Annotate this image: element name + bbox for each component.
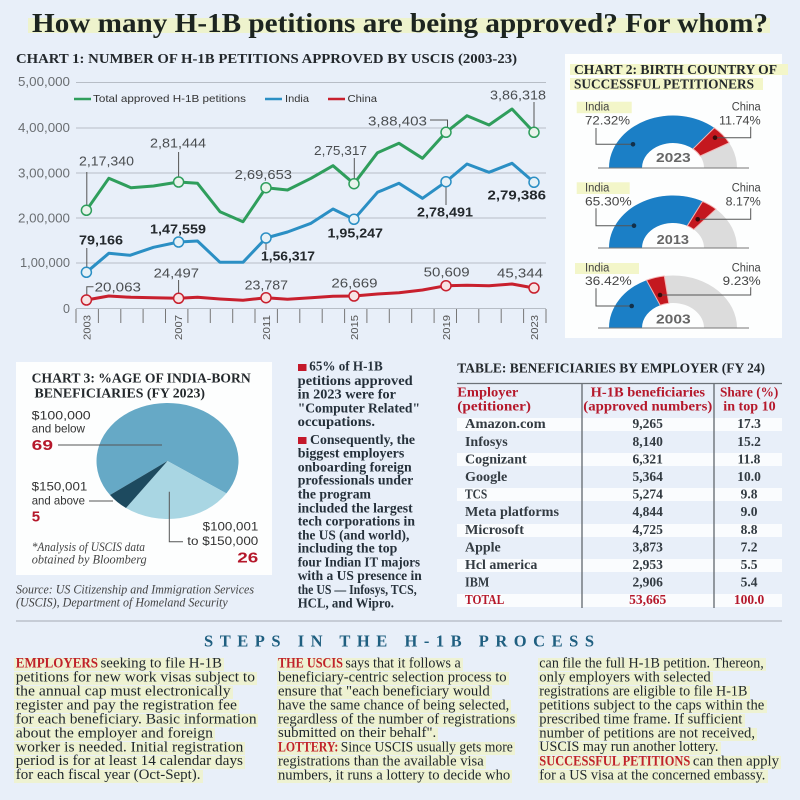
label: $150,001 and above (32, 480, 88, 526)
panel: chart 1 line chart (16, 51, 546, 340)
data labels: China: 45,344 (497, 267, 543, 281)
y axis labels (18, 75, 70, 316)
text block: key points: Consequently, the (310, 433, 415, 448)
text block: key points: included the largest (298, 501, 413, 516)
steps column 1: about the employer and foreign (16, 725, 214, 741)
steps heading: STEPS IN THE H-1B PROCESS (204, 632, 594, 651)
x axis year labels (82, 315, 541, 340)
label: $100,000 and below: $100,000 (32, 408, 91, 422)
table column: share: 17.3 (737, 416, 761, 431)
table column: employer: TCS (465, 487, 487, 502)
data labels: China (95, 266, 543, 295)
chart 3 heading: BENEFICIARIES (FY 2023) (34, 385, 205, 400)
text block: key points: the program (298, 487, 371, 502)
text block: key points: in 2023 were for (298, 387, 396, 402)
text block: key points: 65% of H-1B (309, 360, 383, 375)
table column: beneficiaries: 2,953 (633, 557, 663, 572)
steps column 3: can then apply (693, 754, 780, 770)
data labels: China: 20,063 (95, 281, 141, 295)
gauge 2013: India (585, 183, 610, 195)
series: India (81, 163, 539, 277)
x axis year labels: 2007 (174, 315, 185, 340)
steps column 1: seeking to file H-1B (100, 656, 222, 672)
steps column 2: says that it follows a (345, 656, 461, 672)
table header: Share (%) (720, 386, 779, 401)
data labels: total: 2,69,653 (235, 168, 292, 182)
steps column 3: only employers with selected (539, 670, 711, 686)
legend (74, 93, 377, 105)
gauge 2013 (577, 182, 761, 248)
steps column 3: USCIS may run another lottery. (539, 739, 718, 755)
chart 2 heading (570, 62, 788, 91)
table header: (approved numbers) (583, 400, 713, 415)
steps column 1: period is for at least 14 calendar days (16, 753, 243, 769)
legend: Total approved H-1B petitions (93, 93, 246, 105)
data labels: total: 2,17,340 (79, 155, 134, 169)
data labels: total (79, 88, 546, 182)
steps column 2 (277, 656, 517, 783)
panel: chart 2 birth country gauges (565, 54, 788, 338)
label: $100,000 and below (32, 408, 91, 454)
table column: employer: Cognizant (465, 452, 527, 467)
steps column 2: regardless of the number of registrations (278, 711, 516, 727)
legend: India (285, 93, 309, 105)
table column: share: 5.4 (741, 575, 758, 590)
steps column 2: ensure that "each beneficiary would (278, 684, 491, 700)
text block: key points: "Computer Related" (298, 401, 420, 416)
label: $100,001 to $150,000: 26 (237, 549, 258, 566)
steps column 2: numbers, it runs a lottery to decide who (278, 767, 510, 783)
gauge 2023 (577, 102, 761, 168)
text block: key points: the US (and world), (298, 528, 409, 543)
data labels: India: 79,166 (79, 233, 123, 247)
text block: key points: professionals under (298, 473, 413, 488)
title: How many H-1B petitions are being approved? For whom? (32, 8, 768, 38)
steps column 3: petitions subject to the caps within the (539, 698, 764, 714)
steps column 3: for a US visa at the concerned embassy. (539, 767, 765, 783)
table column: beneficiaries: 9,265 (633, 416, 663, 431)
table column: employer: Google (465, 469, 507, 484)
table column: beneficiaries: 2,906 (633, 575, 663, 590)
gauge 2013: 2013 (657, 232, 689, 247)
table column: employer: Infosys (465, 434, 508, 449)
steps column 3 (538, 656, 781, 783)
steps column 3: registrations are eligible to file H-1B (539, 684, 747, 700)
table column: beneficiaries: 53,665 (629, 592, 667, 607)
data labels: India: 1,47,559 (150, 222, 206, 236)
table column: beneficiaries: 5,274 (633, 487, 663, 502)
table column: employer (465, 416, 559, 607)
text block: key points: including the top (298, 542, 398, 557)
table column: beneficiaries: 8,140 (633, 434, 663, 449)
table column: employer: Hcl america (465, 557, 538, 572)
gauge 2003 (575, 263, 761, 328)
x axis year labels: 2015 (350, 315, 361, 340)
footnote: obtained by Bloomberg (32, 552, 147, 566)
table column: beneficiaries: 3,873 (633, 540, 663, 555)
data labels: total: 2,75,317 (314, 144, 367, 158)
table header (457, 386, 779, 415)
series: China (81, 281, 539, 305)
data labels: total: 3,88,403 (368, 115, 427, 129)
table column: share: 9.0 (741, 504, 758, 519)
table column: beneficiaries: 5,364 (633, 469, 663, 484)
source note: Source: US Citizenship and Immigration Services (16, 582, 254, 596)
text block: key points: four Indian IT majors (298, 556, 421, 571)
label: $150,001 and above: 5 (32, 509, 40, 526)
steps column 2: beneficiary-centric selection process to (278, 670, 507, 686)
data labels: China: 26,669 (331, 276, 378, 290)
chart 2 heading: SUCCESSFUL PETITIONERS (574, 76, 754, 91)
table column: share: 15.2 (737, 434, 761, 449)
gauge 2003: 2003 (656, 311, 691, 326)
steps column 1: for each fiscal year (Oct-Sept). (16, 767, 200, 783)
y axis labels: 0 (63, 302, 70, 316)
pie leaders (58, 445, 183, 542)
gauge 2023: 72.32% (585, 115, 630, 127)
steps column 2: Since USCIS usually gets more (341, 740, 513, 756)
label: $100,000 and below: 69 (32, 437, 53, 454)
text block: key points: with a US presence in (298, 569, 422, 584)
gauge 2013: China (732, 183, 761, 195)
steps column 2: submitted on their behalf". (278, 725, 436, 741)
data labels: India: 2,79,386 (488, 188, 546, 202)
data labels: total: 2,81,444 (150, 137, 206, 151)
y axis labels: 4,00,000 (18, 121, 70, 135)
gauge 2023: India (585, 102, 610, 114)
steps column 3: number of petitions are not received, (539, 725, 755, 741)
series: total approved petitions (81, 109, 539, 222)
table column: beneficiaries: 4,844 (633, 504, 663, 519)
callout stems (87, 102, 534, 296)
chart 1 heading: CHART 1: NUMBER OF H-1B PETITIONS APPROVED BY USCIS (2003-23) (16, 51, 517, 66)
steps column 1 (14, 656, 258, 783)
text block: key points: biggest employers (298, 447, 405, 462)
source note (16, 582, 254, 610)
steps column 2: THE USCIS (278, 656, 343, 672)
table column: employer: TOTAL (465, 592, 504, 607)
table header: (petitioner) (457, 400, 531, 415)
text block: key points: HCL, and Wipro. (298, 596, 394, 611)
x axis year labels: 2023 (530, 315, 541, 340)
steps column 2: registrations than the available visa (278, 754, 484, 770)
x axis year labels: 2011 (262, 315, 273, 340)
data labels: India: 1,56,317 (261, 250, 315, 264)
y axis labels: 1,00,000 (20, 256, 70, 270)
data labels: India: 2,78,491 (417, 206, 473, 220)
label: $100,001 to $150,000: to $150,000 (187, 534, 259, 548)
table header: H-1B beneficiaries (591, 386, 706, 401)
x axis year labels: 2019 (442, 315, 453, 340)
table column: share: 10.0 (737, 469, 761, 484)
steps column 1: EMPLOYERS (16, 656, 98, 672)
data labels: total: 3,86,318 (490, 88, 546, 102)
gauge 2003: China (732, 263, 761, 275)
table header: Employer (457, 386, 518, 401)
y axis labels: 2,00,000 (18, 212, 70, 226)
data labels: India (79, 188, 546, 264)
y axis labels: 5,00,000 (18, 75, 70, 89)
text block: key points: occupations. (298, 415, 375, 430)
gauge 2023: China (732, 102, 761, 114)
table column: share: 7.2 (741, 540, 758, 555)
data labels: China: 50,609 (424, 266, 470, 280)
steps column 3: can file the full H-1B petition. Thereon, (539, 656, 764, 672)
table column: beneficiaries: 6,321 (633, 452, 663, 467)
table row stripes (457, 418, 782, 607)
text block: key points: tech corporations in (298, 515, 415, 530)
steps column 1: for each beneficiary. Basic information (16, 711, 257, 727)
steps column 3: SUCCESSFUL PETITIONS (539, 754, 690, 770)
table column: beneficiaries: 4,725 (633, 522, 663, 537)
gauge 2013: 65.30% (585, 197, 632, 209)
text block: key points: petitions approved (298, 374, 413, 389)
table column: employer: IBM (465, 575, 490, 590)
data labels: China: 23,787 (245, 278, 288, 292)
chart 3 heading (32, 371, 251, 400)
label: $100,000 and below: and below (32, 421, 85, 435)
text block: key points: the US — Infosys, TCS, (298, 583, 417, 598)
x axis year labels: 2003 (82, 315, 94, 340)
footnote: *Analysis of USCIS data (32, 540, 145, 554)
label: $150,001 and above: $150,001 (32, 480, 88, 494)
table column: share: 100.0 (734, 592, 764, 607)
table column: employer: Apple (465, 540, 501, 555)
gauge 2023: 2023 (656, 150, 691, 165)
label: $100,001 to $150,000 (187, 520, 259, 566)
steps column 2: LOTTERY: (278, 740, 338, 756)
label: $100,001 to $150,000: $100,001 (203, 520, 259, 534)
table column: share: 8.8 (741, 522, 758, 537)
text block: key points: onboarding foreign (298, 461, 412, 476)
steps column 1: petitions for new work visas subject to (16, 670, 255, 686)
steps column 1: worker is needed. Initial registration (16, 739, 244, 755)
steps column 3: prescribed time frame. If sufficient (539, 711, 742, 727)
gauge 2013: 8.17% (726, 197, 761, 209)
steps column 1: the annual cap must electronically (16, 684, 231, 700)
data labels: China: 24,497 (154, 267, 199, 281)
footnote (32, 540, 147, 566)
steps column 2: have the same chance of being selected, (278, 698, 509, 714)
table column: share: 9.8 (741, 487, 758, 502)
panel: employer table (457, 361, 782, 608)
table header: in top 10 (723, 400, 776, 415)
table column: share: 11.8 (738, 452, 761, 467)
gauge 2003: 36.42% (585, 276, 632, 288)
steps column 1: register and pay the registration fee (16, 698, 237, 714)
chart 2 heading: CHART 2: BIRTH COUNTRY OF (574, 62, 777, 77)
label: $150,001 and above: and above (32, 493, 85, 507)
text block: key points (298, 360, 422, 611)
data labels: India: 1,95,247 (328, 227, 383, 241)
table heading: TABLE: BENEFICIARIES BY EMPLOYER (FY 24) (457, 361, 765, 376)
panel: chart 3 pie (16, 362, 272, 575)
pie chart (97, 403, 239, 519)
table column: employer: Amazon.com (465, 416, 547, 431)
table column: employer: Microsoft (465, 522, 525, 537)
legend: China (348, 93, 377, 105)
gauge 2003: India (585, 263, 610, 275)
gauge 2003: 9.23% (723, 276, 761, 288)
table column: beneficiaries (629, 416, 667, 607)
table column: share (734, 416, 764, 607)
y axis labels: 3,00,000 (18, 166, 70, 180)
source note: (USCIS), Department of Homeland Security (16, 596, 228, 610)
gauge 2023: 11.74% (719, 115, 761, 127)
chart 3 heading: CHART 3: %AGE OF INDIA-BORN (32, 371, 251, 386)
table column: share: 5.5 (741, 557, 758, 572)
table column: employer: Meta platforms (465, 504, 559, 519)
